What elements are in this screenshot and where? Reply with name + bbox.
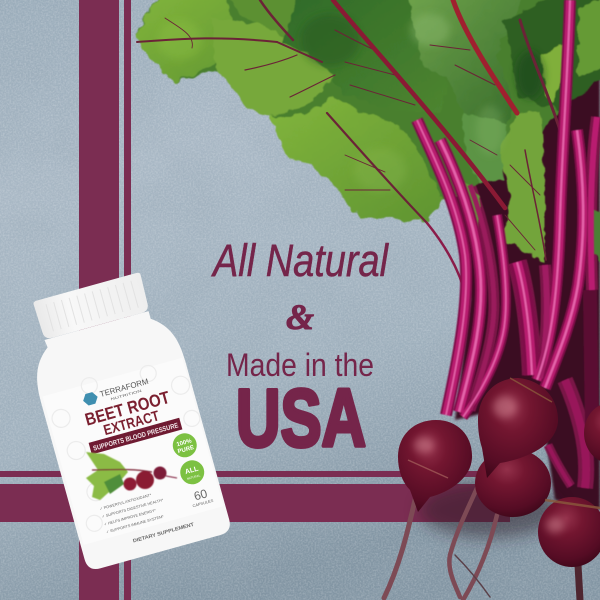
dark mass behind stems [420, 60, 600, 510]
badge: 100% pure: PURE [177, 445, 195, 455]
leaf veins [137, 0, 560, 260]
benefit list: ✓ SUPPORTS IMMUNE SYSTEM* [106, 514, 165, 534]
beet left [398, 420, 472, 512]
product bottle [15, 267, 233, 572]
beet crown texture [408, 378, 600, 508]
badge: 100% pure [170, 431, 200, 460]
headline: Made in the: Made in the [226, 347, 374, 383]
leaf highlight: top right band [542, 42, 565, 105]
benefit list: ✓ SUPPORTS DIGESTIVE HEALTH* [101, 498, 164, 519]
beet lower right [538, 497, 600, 567]
bottle cap [33, 272, 150, 340]
leaf: upper left second [212, 0, 335, 117]
capsule count: CAPSULES [192, 498, 214, 508]
beet lower middle [475, 449, 551, 517]
illustration beets [124, 478, 136, 490]
leaves [135, 0, 600, 265]
leaf: right front [500, 111, 545, 262]
ampersand: & [286, 297, 314, 337]
logo mark [82, 391, 99, 407]
illustration leaves [86, 452, 128, 500]
benefit list: ✓ POWERFUL ANTIOXIDANT* [99, 493, 152, 511]
leaf: far left [135, 0, 277, 83]
badge: all natural: ALL [184, 465, 200, 476]
beet tails [384, 465, 580, 600]
headline: All Natural: All Natural [210, 235, 390, 286]
dietary supplement: DIETARY SUPPLEMENT [132, 522, 195, 544]
leaf shading [158, 14, 544, 192]
beet centre [478, 378, 558, 478]
leaf: low left front [270, 97, 442, 222]
bottle body [25, 305, 233, 572]
banner: supports blood pressure: SUPPORTS BLOOD PRESSURE [93, 422, 180, 453]
red midribs [333, 0, 517, 300]
leaf: top centre right [407, 0, 525, 123]
illustration stem [92, 470, 152, 472]
label panel [43, 358, 223, 545]
brand logo [82, 377, 151, 409]
beet plant [135, 0, 600, 600]
leaf: small lower [452, 172, 480, 240]
leaf: top right dark [503, 0, 600, 110]
capsule count: 60 [192, 486, 209, 503]
capsule count [188, 485, 214, 508]
leaf: small middle [463, 113, 507, 183]
leaf base [135, 0, 600, 222]
product title: Beet Root: BEET ROOT [83, 387, 172, 430]
headline: USA: USA [236, 373, 366, 464]
illustration leaf dark [104, 474, 124, 494]
leaf: top sliver [225, 0, 300, 40]
badge: all natural [177, 457, 207, 487]
leaf highlight: far right [578, 0, 600, 76]
badge: all natural: NATURAL [186, 473, 201, 481]
label beet illustration [86, 452, 177, 500]
badge: 100% pure: 100% [176, 438, 193, 448]
beet right edge [584, 403, 600, 463]
leaf: edge right [585, 205, 600, 265]
product title: Extract: EXTRACT [102, 408, 161, 439]
illustration beet tail [166, 476, 177, 478]
benefit list [99, 490, 169, 534]
brand subtitle: NUTRITION [110, 389, 143, 401]
beet shadow [420, 482, 560, 538]
pink stems front [417, 0, 597, 488]
brand name: TERRAFORM [99, 377, 150, 399]
benefit list: ✓ HELPS IMPROVE ENERGY* [104, 508, 157, 527]
headline block [210, 235, 390, 464]
leaf: large dark centre [283, 0, 447, 113]
pink stems back [470, 117, 597, 488]
label hexagon pattern [44, 352, 222, 534]
beet highlights [414, 396, 564, 533]
